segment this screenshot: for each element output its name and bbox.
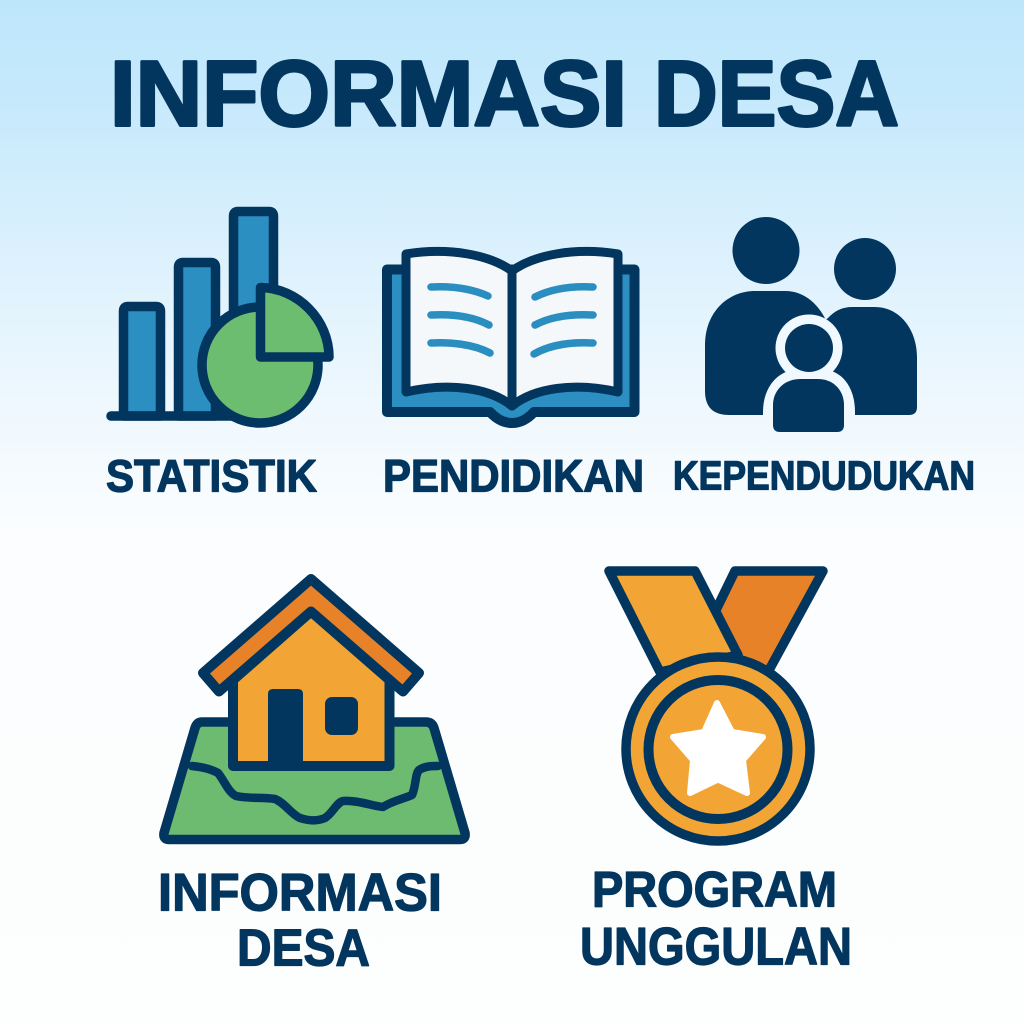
label: program unggulan: UNGGULAN [580, 917, 852, 976]
adult body left [705, 291, 828, 415]
map boundary line [192, 766, 438, 820]
left page [406, 251, 512, 406]
pie circle [202, 307, 318, 423]
house roof [203, 579, 419, 692]
ribbon right [700, 571, 823, 672]
right page text lines [534, 287, 593, 354]
icon: statistics bars and pie chart [111, 212, 329, 423]
icon: family of three people [705, 217, 917, 440]
label: informasi desa: DESA [237, 919, 370, 977]
label: statistik: STATISTIK [106, 450, 317, 501]
label: informasi desa: INFORMASI [158, 863, 442, 922]
chart baseline [111, 411, 240, 421]
left page text lines [431, 287, 490, 353]
small bar [124, 306, 160, 416]
ribbon left [609, 571, 738, 672]
tall bar [234, 212, 274, 416]
icon: house on map [164, 579, 465, 840]
icon: open book [387, 251, 634, 423]
title: DESA [654, 42, 899, 146]
title [110, 42, 899, 146]
child head [785, 324, 833, 372]
label: kependudukan: KEPENDUDUKAN [673, 452, 975, 498]
pie slice [260, 288, 329, 357]
adult head left [732, 217, 800, 284]
star [673, 703, 763, 793]
right page [512, 251, 618, 406]
medal disc [626, 657, 810, 841]
adult head right [834, 238, 896, 300]
door [268, 689, 303, 766]
child halo [763, 314, 855, 440]
medal inner ring [648, 680, 788, 819]
house body [233, 612, 390, 766]
label: pendidikan: PENDIDIKAN [383, 450, 644, 501]
icon: medal [609, 571, 823, 841]
book cover [387, 270, 634, 423]
medium bar [178, 262, 216, 416]
title: INFORMASI [110, 42, 627, 146]
map land [164, 722, 465, 840]
label: program unggulan [580, 861, 852, 976]
label: informasi desa [158, 863, 442, 977]
adult body right [800, 307, 917, 415]
child body [773, 379, 844, 432]
window [325, 697, 358, 735]
label: program unggulan: PROGRAM [592, 861, 837, 917]
